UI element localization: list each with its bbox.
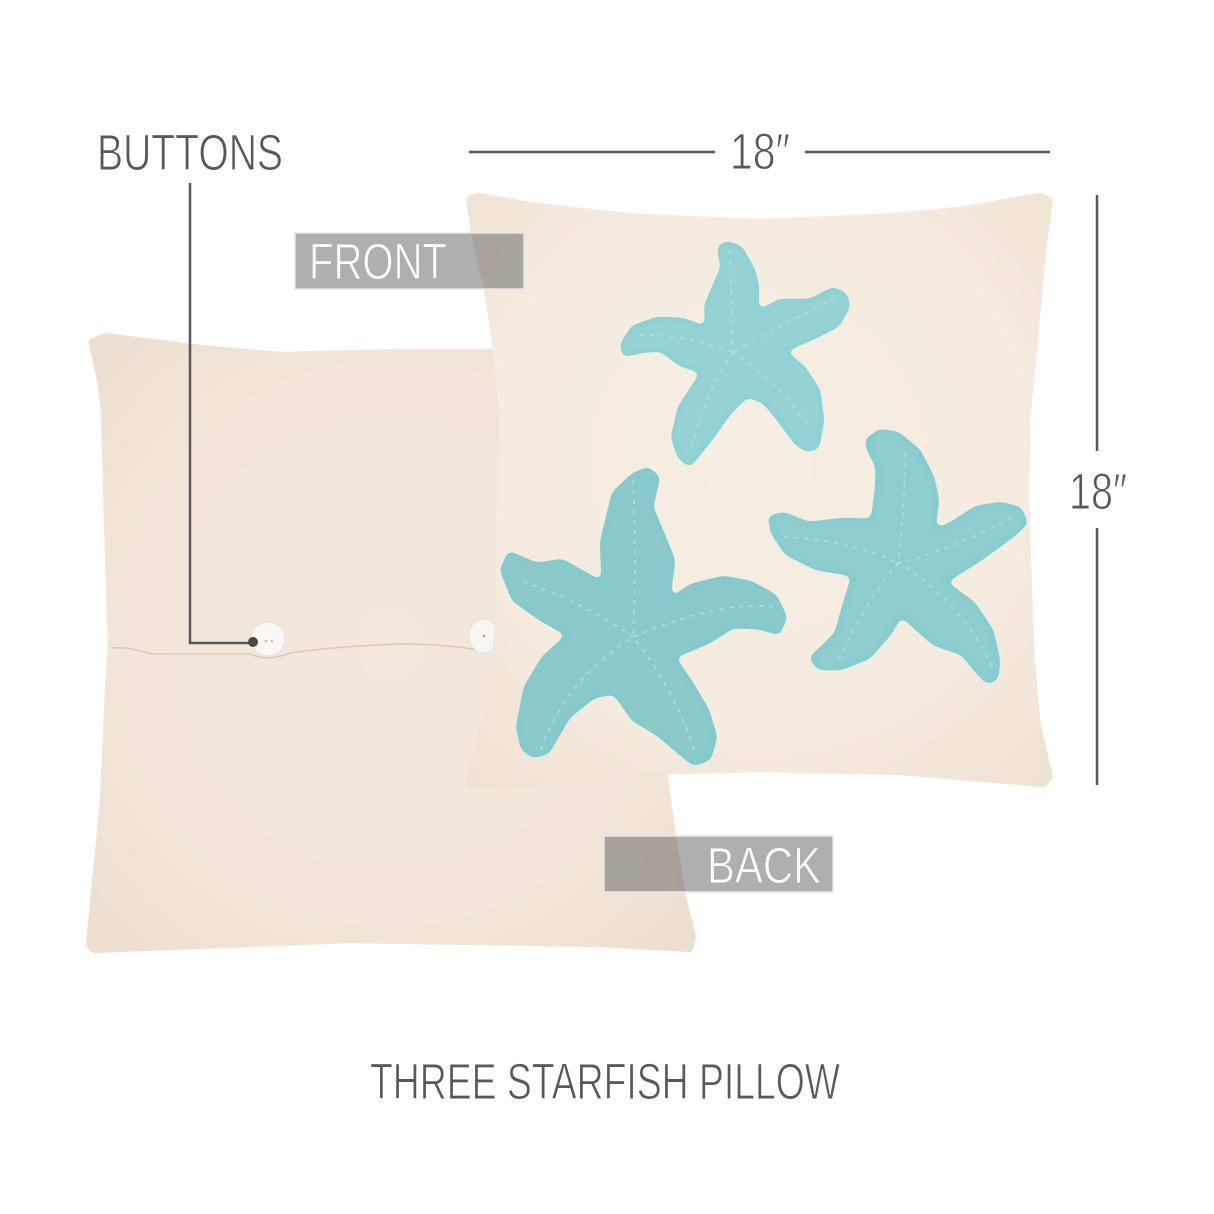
buttons callout <box>97 124 283 647</box>
width dimension: 18″ <box>730 123 790 180</box>
back pillow <box>86 333 696 953</box>
seam <box>112 644 490 658</box>
icon: button left <box>251 622 285 656</box>
icon: button right <box>469 619 499 653</box>
label: FRONT: FRONT <box>309 233 447 290</box>
icon: starfish top <box>621 242 849 466</box>
height dimension: 18″ <box>1069 463 1127 520</box>
icon: starfish left <box>501 468 786 765</box>
title: THREE STARFISH PILLOW <box>370 1053 840 1110</box>
label: BACK <box>604 836 833 894</box>
front pillow <box>465 193 1053 789</box>
icon: starfish right <box>769 430 1027 683</box>
label: BACK: BACK <box>707 837 821 894</box>
buttons callout: BUTTONS <box>97 124 283 181</box>
